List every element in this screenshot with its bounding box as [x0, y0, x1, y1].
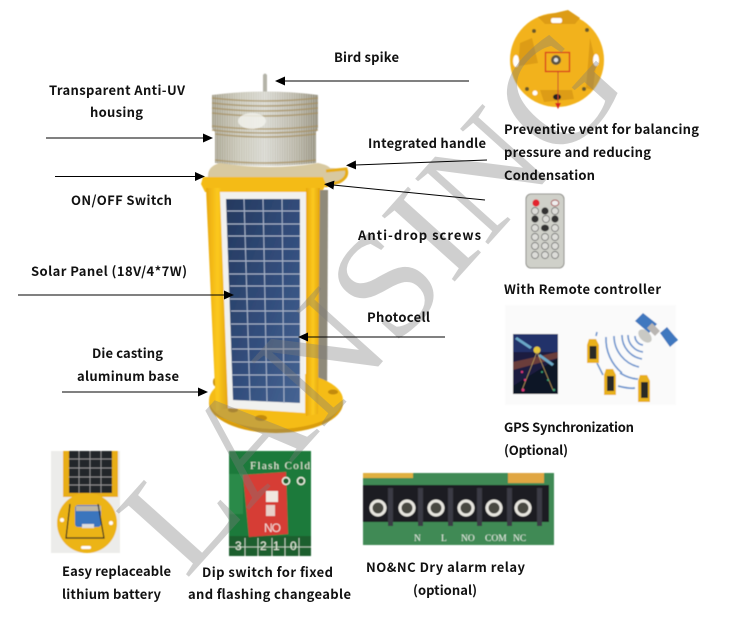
dip switch photo: Flash Cold: [250, 460, 310, 472]
arrow: on/off switch: [55, 176, 196, 178]
label: solar panel: Solar Panel (18V/4*7W): [31, 261, 187, 280]
label: anti-drop screws: Anti-drop screws: [357, 225, 481, 244]
small lights: [587, 339, 650, 402]
dip switch photo: NO: [264, 521, 281, 535]
lithium battery photo: [51, 451, 120, 553]
solar panel: [220, 192, 306, 413]
bird spike: [263, 74, 267, 92]
satellite: [635, 313, 678, 347]
label: dip switch: and flashing changeable: [188, 584, 351, 603]
GPS synchronization illustration: [505, 305, 678, 405]
arrow: integrated handle: [355, 160, 487, 165]
label: die casting base: [77, 343, 179, 385]
label: preventive vent: [504, 119, 699, 184]
terminal relay photo: N: [414, 534, 421, 544]
signal arcs: [596, 332, 643, 388]
body side: [318, 190, 328, 412]
vent detail: round base underside: [510, 10, 604, 109]
label: die casting base: Die casting: [92, 343, 163, 362]
label: on/off switch: ON/OFF Switch: [71, 190, 172, 209]
yellow columns: [206, 188, 229, 411]
label: photocell: Photocell: [367, 307, 430, 326]
label: GPS synchronization: GPS Synchronization: [504, 417, 634, 436]
label: preventive vent: Condensation: [504, 165, 595, 184]
label: GPS synchronization: (Optional): [504, 440, 568, 459]
runway satellite picture: [513, 334, 558, 394]
arrow: anti-drop screws: [333, 185, 485, 200]
label: dip switch: [188, 562, 351, 603]
label: lithium battery: [62, 561, 171, 603]
arrow: die casting base: [62, 391, 199, 393]
label: dry alarm relay: (optional): [413, 580, 477, 599]
label: bird spike: Bird spike: [334, 47, 399, 66]
label: dip switch: Dip switch for fixed: [202, 562, 333, 581]
label: GPS synchronization: [504, 417, 634, 459]
label: housing: Transparent Anti-UV: [49, 80, 186, 99]
arrow: solar panel: [18, 294, 225, 296]
label: housing: [49, 80, 186, 121]
die cast base: [209, 371, 343, 433]
label: dry alarm relay: NO&NC Dry alarm relay: [366, 557, 526, 576]
label: preventive vent: Preventive vent for balancing: [504, 119, 699, 138]
terminal relay photo: COM: [485, 534, 507, 544]
label: die casting base: aluminum base: [77, 366, 179, 385]
terminal relay photo: [363, 473, 554, 545]
watermark: LANSING: [87, 0, 655, 602]
label: remote controller: With Remote controller: [504, 279, 661, 298]
collar and integrated handle: [207, 163, 347, 187]
label: housing: housing: [90, 102, 143, 121]
arrow: bird spike: [284, 80, 469, 82]
dip switch photo: 3: [235, 539, 242, 553]
label: lithium battery: Easy replaceable: [62, 561, 171, 580]
dip switch photo: 2: [260, 539, 267, 553]
label: integrated handle: Integrated handle: [368, 133, 486, 152]
terminal relay photo: NC: [513, 534, 526, 544]
transparent housing: [212, 92, 318, 166]
dip switch photo: 0: [290, 539, 297, 553]
terminal relay photo: L: [441, 534, 447, 544]
terminal relay photo: NO: [461, 534, 475, 544]
arrows: [18, 81, 487, 392]
label: lithium battery: lithium battery: [62, 584, 162, 603]
yellow cap: [201, 177, 326, 192]
dip switch photo: 1: [273, 539, 280, 553]
dip switch photo: [229, 451, 311, 556]
remote controller: [526, 194, 564, 268]
arrow: photocell: [307, 336, 445, 338]
red marker square and arrow: [546, 52, 570, 109]
label: preventive vent: pressure and reducing: [504, 142, 651, 161]
product: obstruction light: [201, 74, 347, 433]
arrow: housing: [46, 137, 204, 139]
label: dry alarm relay: [366, 557, 526, 599]
